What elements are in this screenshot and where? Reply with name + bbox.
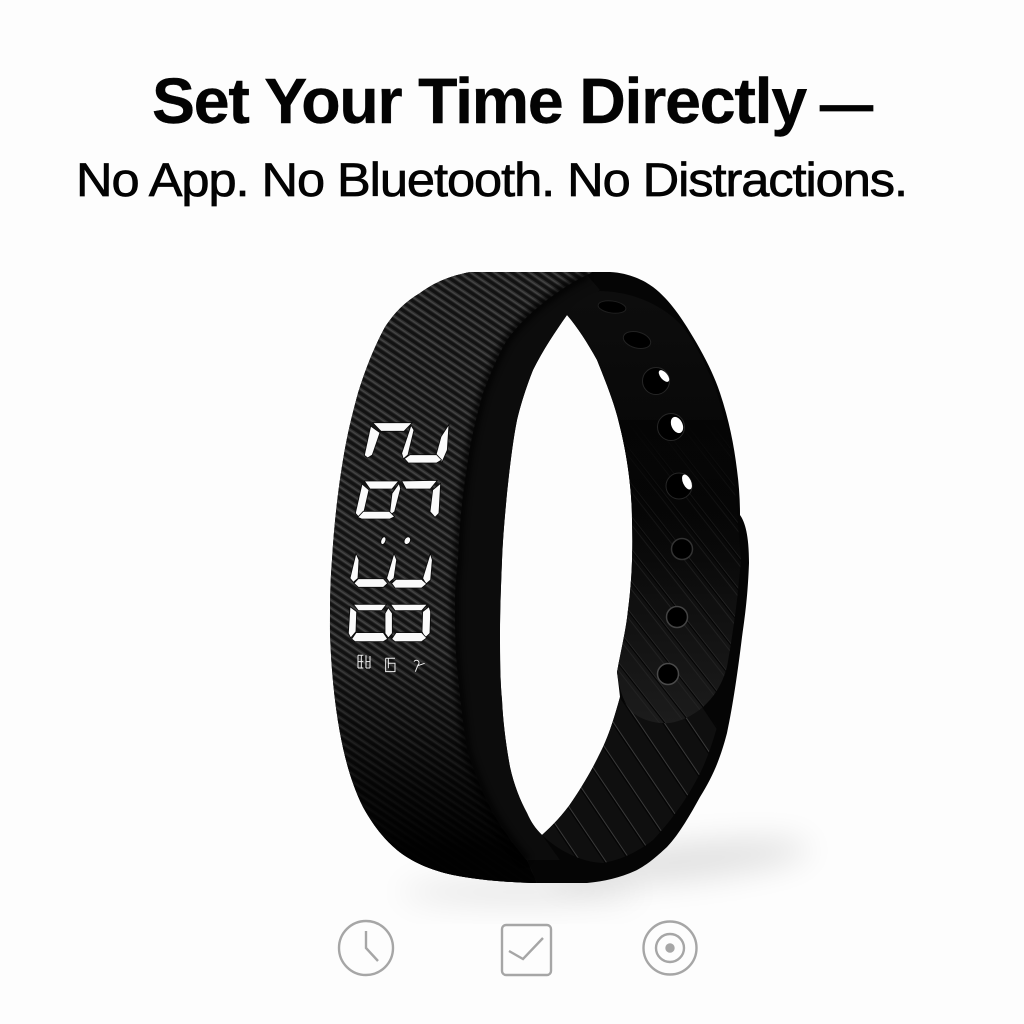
subtitle: No App. No Bluetooth. No Distractions. <box>76 153 907 206</box>
hole 8 <box>658 664 678 684</box>
title: — <box>820 72 873 135</box>
hole 2 <box>621 329 653 351</box>
colon <box>380 536 412 546</box>
wristband <box>300 268 750 890</box>
textured front face <box>330 272 592 883</box>
buckle strap flap <box>567 292 741 724</box>
hole 1 <box>597 299 627 315</box>
hole 4 <box>658 414 686 440</box>
digit group: third <box>350 553 432 588</box>
small status icons <box>358 655 425 672</box>
digit group: fourth <box>348 604 431 642</box>
hole 5 <box>666 473 694 499</box>
strap holes <box>597 299 694 684</box>
hole 3 <box>642 368 671 394</box>
band inner wall <box>455 275 600 860</box>
icon: target <box>644 922 696 974</box>
hole 7 <box>666 606 688 628</box>
icon: checkbox <box>502 925 551 975</box>
infographic page <box>80 76 904 976</box>
digit group: second <box>355 480 441 519</box>
icon: clock <box>339 921 393 975</box>
hole 6 <box>672 538 692 560</box>
inner lower strap with ribs <box>542 697 717 863</box>
band silhouette <box>330 272 749 883</box>
ground shadow <box>400 832 811 900</box>
digit group: top <box>364 423 449 463</box>
LED display <box>348 423 449 672</box>
title: Set Your Time Directly <box>152 65 808 137</box>
